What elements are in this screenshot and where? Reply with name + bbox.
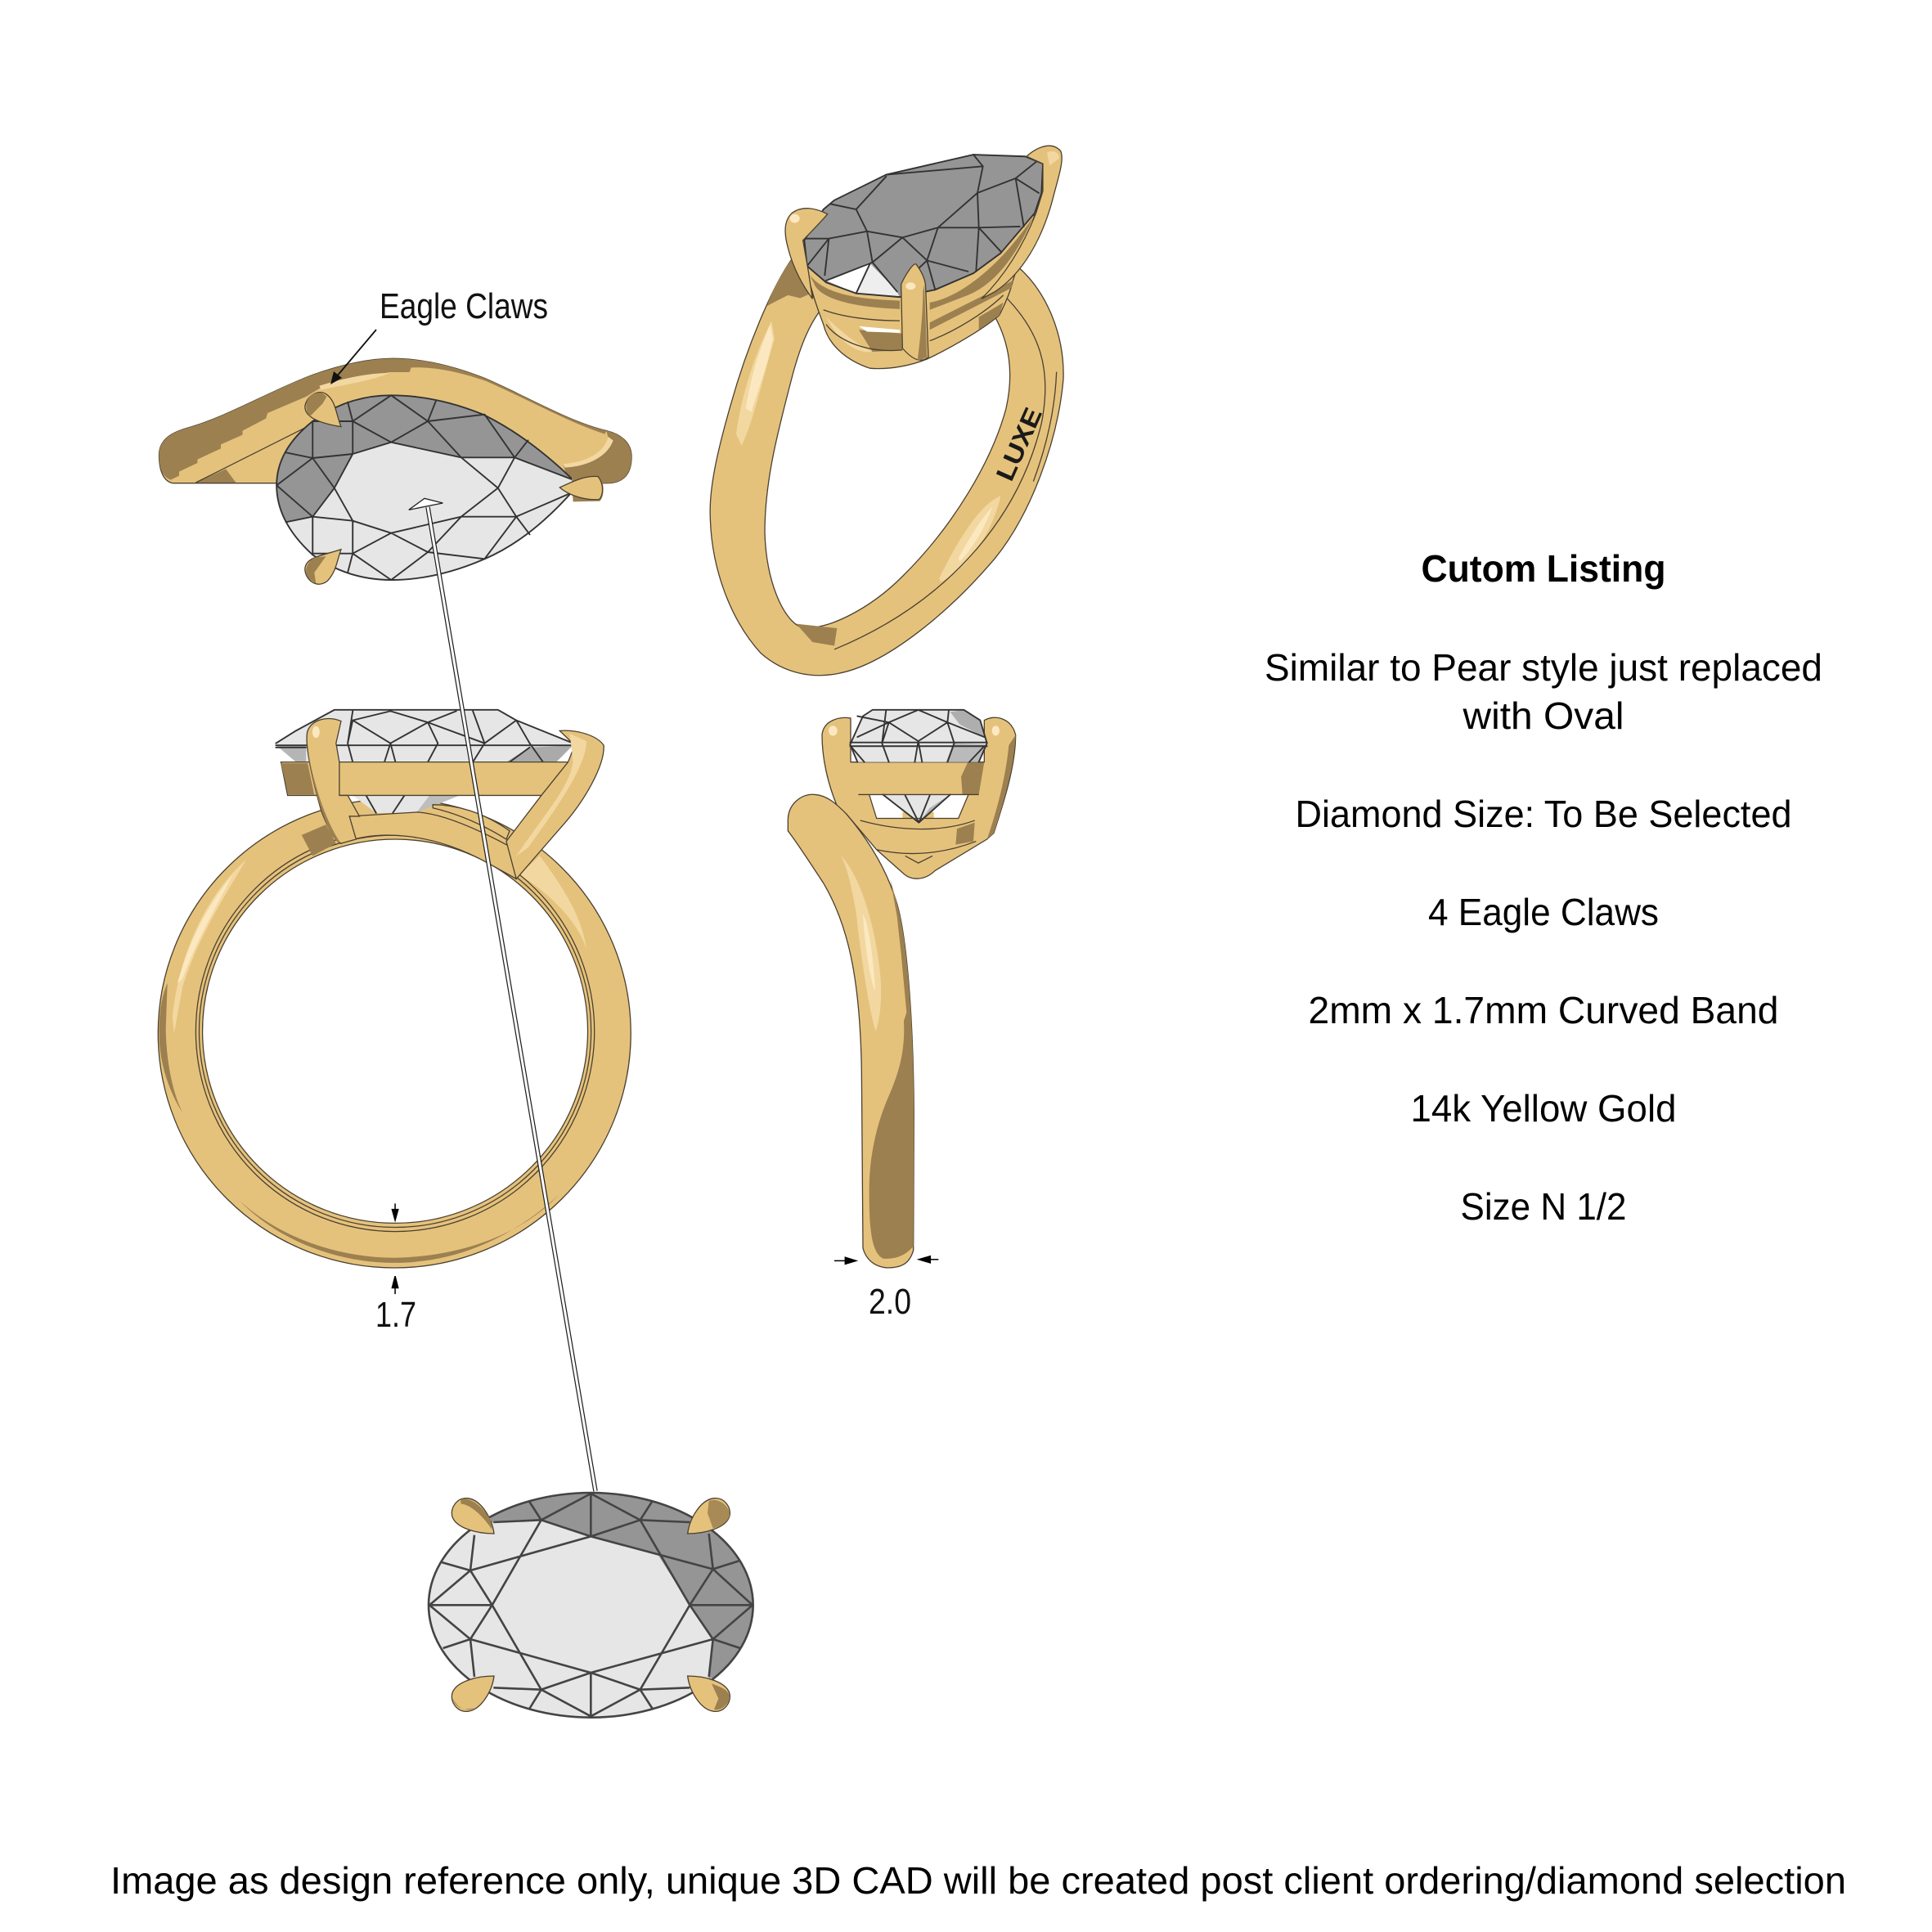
front view diamond crown [276, 710, 573, 762]
eagle claw lower left [305, 550, 341, 584]
label: band thickness: 1.7 [375, 1295, 416, 1335]
thickness arrow top [392, 1203, 398, 1220]
perspective diamond [804, 155, 1043, 297]
thickness arrow bottom [392, 1276, 398, 1294]
LUXE engraving: LUXE [991, 403, 1048, 485]
oval diamond detail [429, 1489, 763, 1718]
specification text block [1265, 547, 1822, 1228]
front view band [158, 799, 631, 1268]
width arrow left [834, 1257, 856, 1264]
indicator line from stone to oval detail [428, 507, 595, 1491]
front view lower diamond pavilion [353, 795, 460, 813]
perspective left prong [785, 209, 828, 299]
top view pear diamond [266, 390, 573, 580]
spec line: metal: 14k Yellow Gold [1410, 1087, 1677, 1130]
top view band [159, 358, 631, 483]
footer disclaimer: Image as design reference only, unique 3D CAD will be created post client ordering/diamond selection [110, 1859, 1846, 1902]
eagle claw upper left [305, 393, 341, 427]
spec line: style: Similar to Pear style just replaced [1265, 646, 1822, 689]
claw bottom left [452, 1676, 494, 1711]
width arrow right [919, 1256, 938, 1263]
spec heading: Cutom Listing [1422, 547, 1665, 590]
side view diamond crown [850, 710, 987, 762]
front view back gallery [302, 805, 523, 878]
indicator arrowhead on stone [409, 498, 443, 510]
spec line: oval: with Oval [1462, 694, 1624, 737]
side view band [788, 794, 914, 1268]
claw top left [452, 1498, 494, 1534]
label: band width: 2.0 [869, 1282, 911, 1322]
front view left prong [307, 719, 359, 843]
spec line: claws: 4 Eagle Claws [1428, 891, 1659, 933]
perspective front prong [901, 264, 928, 361]
claw top right [688, 1498, 730, 1534]
front view ring [158, 710, 631, 1294]
front view basket bar [281, 762, 568, 795]
spec line: size: Size N 1/2 [1461, 1185, 1626, 1228]
perspective band [710, 258, 1063, 676]
front view right prong [506, 730, 604, 878]
oval diamond [429, 1489, 763, 1718]
three quarter perspective ring view [710, 146, 1063, 676]
spec line: diamond size: Diamond Size: To Be Selected [1296, 793, 1791, 835]
eagle claw right [559, 473, 604, 501]
side view setting [822, 717, 1016, 878]
label: eagle claws: Eagle Claws [380, 286, 548, 326]
perspective setting basket [804, 215, 1035, 369]
claw bottom right [688, 1676, 730, 1711]
side view ring [788, 710, 1016, 1268]
perspective right prong [982, 146, 1062, 299]
eagle claws leader arrow [330, 330, 376, 384]
spec line: band: 2mm x 1.7mm Curved Band [1309, 989, 1778, 1031]
ring top view with pear stone [159, 358, 631, 584]
